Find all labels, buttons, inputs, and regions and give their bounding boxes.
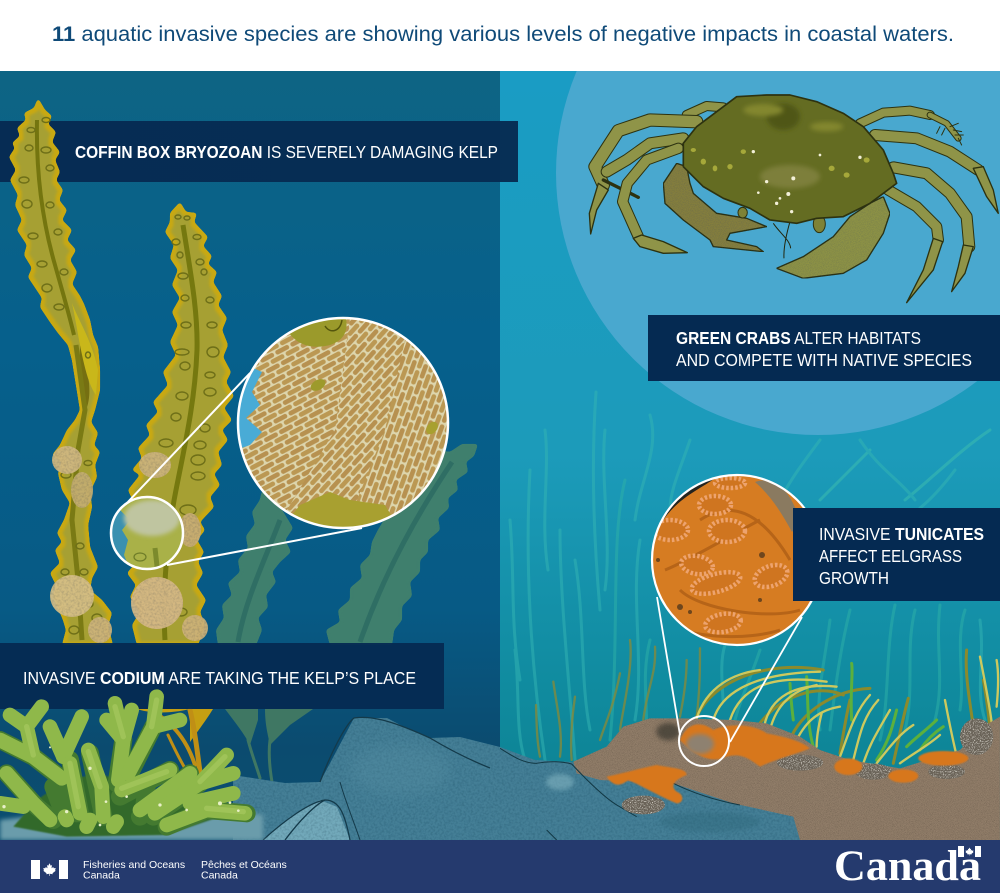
department name: English: Fisheries and Oceans [83,859,185,871]
back kelp fronds [137,444,478,742]
crab mouth parts [738,207,825,233]
caption band: green crabs [648,315,1000,381]
caption: tunicates: AFFECT EELGRASS [819,546,962,566]
back kelp lower stems [150,709,313,782]
kelp frond: centre [125,202,234,645]
magnifier: tunicates [650,470,822,645]
caption: green crabs: AND COMPETE WITH NATIVE SPECIES [676,350,972,370]
caption: green crabs: GREEN CRABS ALTER HABITATS [676,328,921,348]
zoom callout lines: tunicates [657,597,802,742]
sand and tunicates on rock [500,717,1000,840]
kelp frond: left [9,98,113,645]
panel: right eelgrass water [500,71,1000,840]
crab antennae [773,222,791,258]
caption: green crabs [676,328,972,370]
rock: right sea floor [500,747,800,840]
dark shading on mound [656,723,680,740]
title: 11 aquatic invasive species are showing various levels of negative impacts in coastal waters. [52,23,954,46]
panel: crab spotlight circle [556,71,1000,435]
crab carapace [683,95,897,223]
icon: Canadian flag signature [31,860,68,879]
crab right claw [777,197,890,278]
codium sparkle [2,746,240,826]
department name: English [83,859,185,882]
small circle: bryozoan on kelp [105,495,183,575]
codium shadow layer [0,727,247,827]
department name: English: Canada [83,870,120,882]
sand mound [573,717,1000,840]
Canada wordmark: Canada [834,843,981,890]
codium highlight [27,700,243,812]
crab legs [589,106,998,303]
magnifier: bryozoan cells on kelp [236,318,449,530]
caption band: coffin box bryozoan [0,121,518,182]
caption: tunicates: GROWTH [819,568,889,588]
codium branches [0,697,245,827]
orange tunicate colonies [607,724,968,803]
codium seaweed [0,697,247,837]
small circle: tunicates on rock [679,716,729,766]
panel: left kelp water [0,71,500,840]
caption: codium: INVASIVE CODIUM ARE TAKING THE KELP’S PLACE [23,668,416,688]
barnacle clusters [622,718,993,814]
caption: tunicates: INVASIVE TUNICATES [819,524,984,544]
foreground eelgrass [536,640,998,787]
caption band: tunicates [793,508,1000,601]
caption: coffin box bryozoan: COFFIN BOX BRYOZOAN IS SEVERELY DAMAGING KELP [75,142,498,162]
department name: French: Canada [201,870,238,882]
caption band: codium [0,643,444,709]
blue rock crack line [500,748,740,840]
crab left claw [663,163,767,252]
rock: left sea floor [0,717,500,840]
zoom callout lines: bryozoan [127,373,362,565]
department name: French: Pêches et Océans [201,859,287,871]
caption: tunicates [819,524,984,588]
department name: French [201,859,287,882]
crab [589,95,998,303]
background eelgrass blades [510,392,990,760]
codium dark base [13,773,220,837]
footer bar [0,840,1000,893]
